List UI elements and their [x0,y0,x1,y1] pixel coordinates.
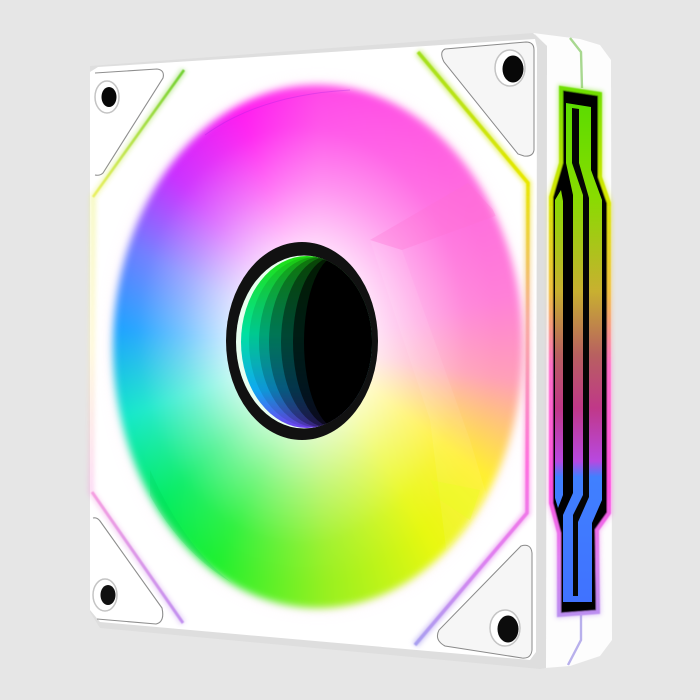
fan side face [533,33,612,668]
screw hole [95,81,119,113]
fan illustration [86,33,616,668]
rainbow light glow [110,82,526,610]
fan blades [150,90,500,600]
neon outline [551,88,609,615]
rainbow fan disc [100,72,540,622]
corner plate: bottom left [93,518,163,624]
hub infinity mirror [226,242,378,440]
left strip [555,190,563,508]
middle strip [563,103,602,602]
screw hole [495,50,525,86]
middle black channel [572,108,589,596]
screw hole [490,610,520,646]
neon glow [551,88,609,615]
corner plate: bottom right [437,545,532,658]
side RGB light panel [551,88,609,615]
fan front frame [90,33,547,669]
corner plate: top left [95,69,163,175]
side thin light lines [568,38,582,665]
corner plate: top right [442,42,534,156]
screw hole [93,579,117,611]
neon rim: right [415,52,528,645]
neon rim: left [91,70,184,623]
